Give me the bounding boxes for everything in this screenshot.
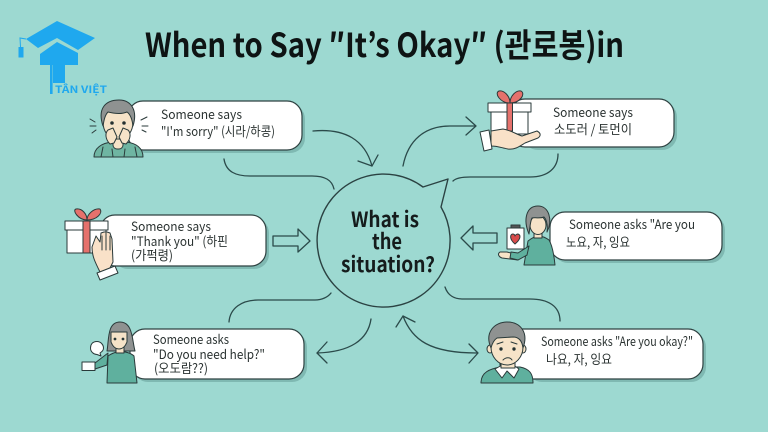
icon: person holding bag with heart (499, 206, 555, 265)
panel: gift (480, 91, 677, 151)
panel: are you (499, 206, 725, 265)
icon: apologising person (90, 100, 148, 157)
logo: Tân Việt (18, 21, 107, 96)
icon: worried man (481, 322, 533, 383)
block arrow: thank you to centre (273, 229, 310, 252)
panel: I'm sorry (90, 100, 305, 157)
logo: Tân Việt: TÂN VIỆT (55, 81, 107, 96)
panel: I'm sorry: Someone says (161, 104, 242, 123)
title: When to Say ″It’s Okay″ (관로봉)in (145, 19, 624, 67)
connector: okay upper line (445, 287, 560, 321)
panel: thank you: Someone says (131, 216, 211, 235)
panel: thank you (65, 209, 269, 280)
icon: gift and raised hand (65, 209, 118, 280)
panel: need help (82, 322, 307, 383)
panel: thank you: (가퍽령) (131, 245, 173, 264)
connector: gift lower line (453, 154, 558, 181)
question text: situation? (341, 249, 435, 279)
central speech bubble (317, 174, 450, 307)
panel: need help: Someone asks (153, 329, 229, 348)
panel: are you: 노요, 자, 잉요 (566, 232, 630, 251)
panel: gift: 소도러 / 토먼이 (554, 119, 632, 138)
panel: are you: Someone asks "Are you (569, 214, 695, 233)
block arrow: are you to centre (461, 226, 497, 250)
panel: need help: "Do you need help?" (153, 344, 265, 363)
connector: help upper line (229, 293, 331, 322)
icon: hand holding gift (480, 91, 540, 151)
panel: are you okay (481, 322, 706, 383)
panel: thank you: "Thank you" (하핀 (131, 231, 228, 250)
connector: sorry to centre (313, 131, 378, 166)
question text (341, 204, 435, 279)
question text: the (372, 226, 402, 256)
panel: are you okay: Someone asks "Are you okay?" (541, 331, 693, 350)
panel: gift: Someone says (553, 102, 633, 121)
panel: I'm sorry: "I'm sorry" (시라/하콩) (161, 121, 275, 140)
connector: sorry lower line (224, 159, 334, 189)
connector: centre to help (317, 319, 371, 363)
connector: two-way arrow okay and centre (396, 316, 478, 363)
question text: What is (351, 204, 419, 234)
panel: are you okay: 나요, 자, 잉요 (546, 349, 612, 368)
connector: centre to gift (403, 117, 476, 166)
icon: woman offering help (82, 322, 137, 383)
panel: need help: (오도람??) (154, 358, 208, 377)
